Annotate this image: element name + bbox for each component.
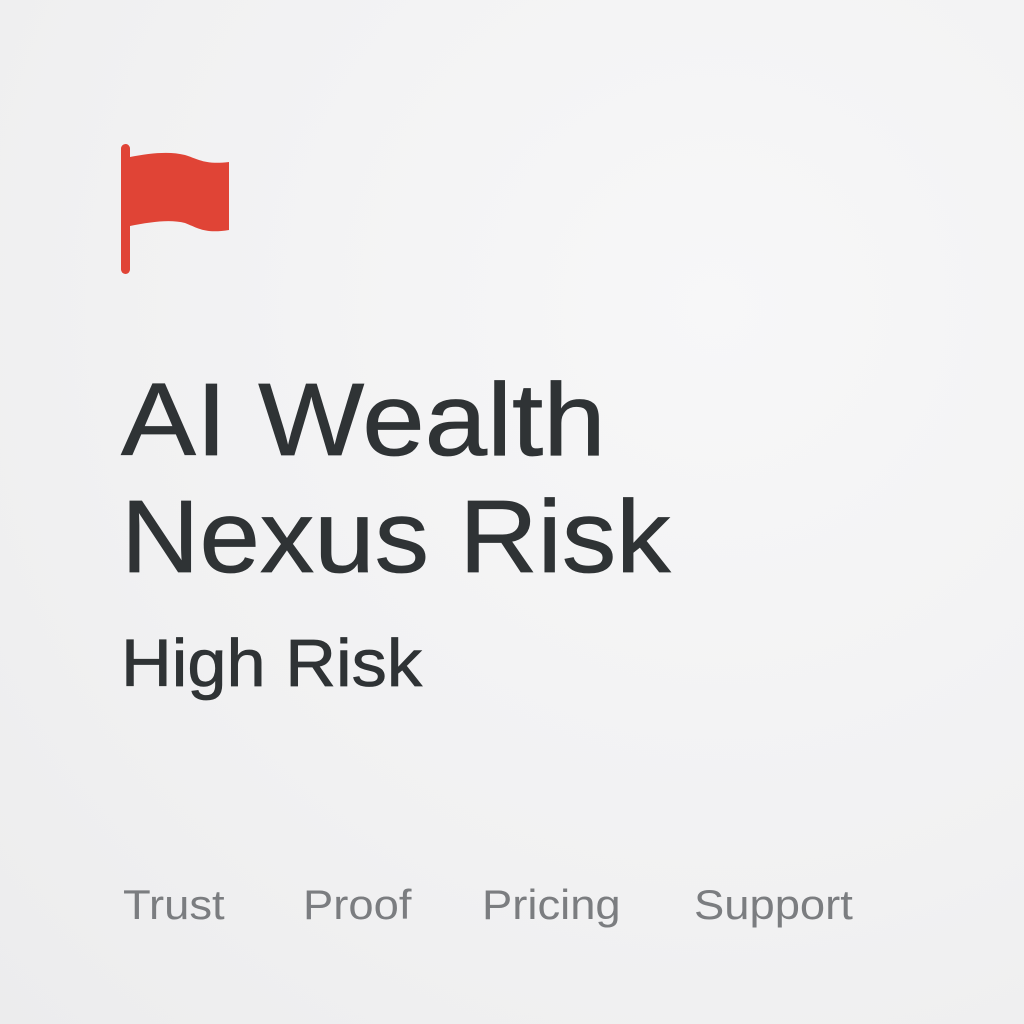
title [120,362,672,594]
icon: red flag [121,144,229,274]
subtitle: risk level: High Risk [121,626,422,701]
nav: Support: Support [694,881,853,928]
nav: Pricing: Pricing [482,881,621,928]
nav: Proof: Proof [303,881,411,928]
title: Nexus Risk [121,479,670,594]
title: AI Wealth [121,362,606,477]
nav: Trust: Trust [123,881,225,928]
